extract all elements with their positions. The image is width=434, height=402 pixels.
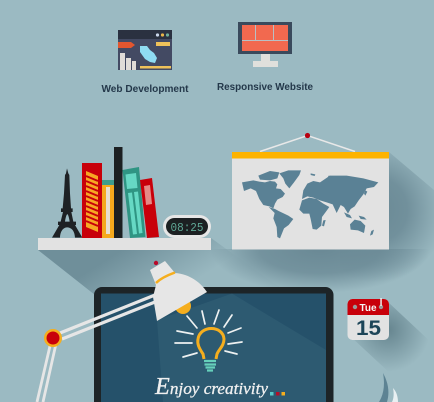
lamp joint (44, 329, 62, 347)
map shadow: bottom band (210, 249, 434, 295)
lamp band (156, 272, 175, 283)
book: red with stripes (82, 163, 102, 238)
partial swoosh bottom right (379, 373, 398, 402)
book: yellow (102, 180, 114, 238)
map shadow: right side (340, 152, 434, 290)
hanging wire and pin (260, 133, 355, 152)
book: green tilted (122, 167, 146, 238)
digital clock: 08:25 (170, 222, 204, 235)
desk lamp (37, 261, 207, 402)
icon: web development (118, 30, 172, 70)
laptop screen (94, 287, 334, 402)
calendar icon: 15 (356, 317, 381, 340)
lamp upper arm (60, 295, 155, 339)
lamp lower arm (37, 346, 56, 402)
shelf (38, 238, 211, 250)
light bulb with rays (175, 310, 242, 370)
icon: eiffel tower (52, 168, 82, 238)
book: black (114, 147, 122, 238)
calendar shadow (350, 302, 434, 380)
label: web development: Web Development (102, 83, 189, 95)
digital clock (163, 215, 211, 238)
label: responsive website: Responsive Website (217, 81, 313, 93)
screen text: enjoy creativity: Enjoy creativity (154, 374, 268, 400)
icon: responsive website monitor (238, 22, 292, 67)
calendar icon (348, 298, 389, 340)
lamp bulb (175, 298, 191, 314)
calendar icon: Tue (359, 303, 377, 314)
world map panel (232, 152, 389, 250)
light beam on screen (157, 294, 326, 402)
shelf shadow (38, 238, 300, 300)
lamp shade (150, 261, 207, 321)
three coloured dots (270, 392, 285, 396)
world map (242, 170, 378, 238)
book: red tilted (140, 178, 159, 238)
lamp tip (154, 261, 158, 265)
